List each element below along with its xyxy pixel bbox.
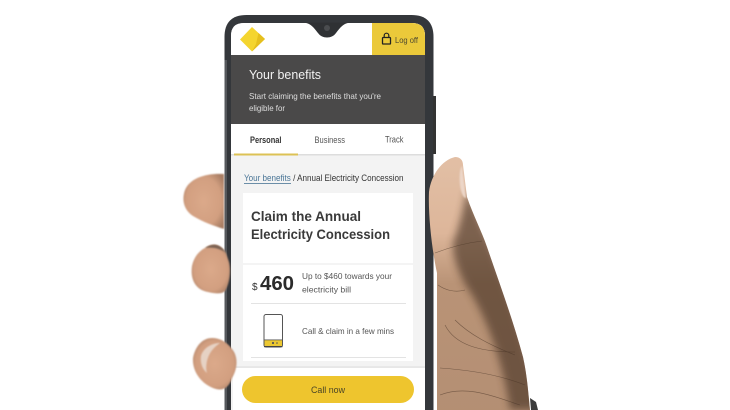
camera notch [303, 22, 351, 38]
card heading: Claim the Annual [251, 208, 361, 224]
finger 2 [192, 245, 230, 293]
log off button [372, 23, 425, 55]
icon: padlock [382, 33, 390, 44]
amount: 460 [260, 273, 294, 295]
amount description [302, 272, 392, 294]
banner description: Start claiming the benefits that you're [249, 91, 381, 101]
finger 1 [183, 174, 224, 229]
banner description [249, 91, 381, 113]
thumb nail highlight [460, 166, 466, 198]
call now button [242, 376, 414, 403]
tab: track: Track [385, 134, 404, 144]
phone body [224, 15, 436, 410]
call now button: Call now [311, 385, 345, 395]
banner description: eligible for [249, 103, 285, 113]
panel: your benefits banner [231, 55, 425, 124]
banner heading: Your benefits [249, 67, 321, 82]
tab: business: Business [314, 135, 346, 145]
amount description: Up to $460 towards your [302, 272, 392, 281]
amount description: electricity bill [302, 286, 351, 294]
panel: claim card [243, 193, 413, 361]
tab: personal: Personal [250, 135, 282, 145]
card heading: Electricity Concession [251, 226, 390, 242]
skin creases [435, 241, 525, 405]
tabs [231, 124, 425, 156]
breadcrumb: Your benefits / Annual Electricity Concession [244, 173, 404, 183]
palm and thumb [429, 157, 540, 410]
thumb shadow [453, 190, 540, 410]
log off label: Log off [395, 36, 419, 45]
screen [231, 22, 425, 410]
amount: $ [252, 282, 258, 293]
icon: phone [264, 314, 282, 347]
footer bar [233, 366, 425, 410]
header bar [231, 22, 425, 56]
icon: diamond logo [240, 27, 265, 52]
card heading [251, 208, 390, 242]
phone held in hand illustration [182, 15, 538, 410]
call and claim text: Call & claim in a few mins [302, 326, 394, 336]
side button [433, 96, 436, 154]
finger 3 [193, 338, 236, 390]
